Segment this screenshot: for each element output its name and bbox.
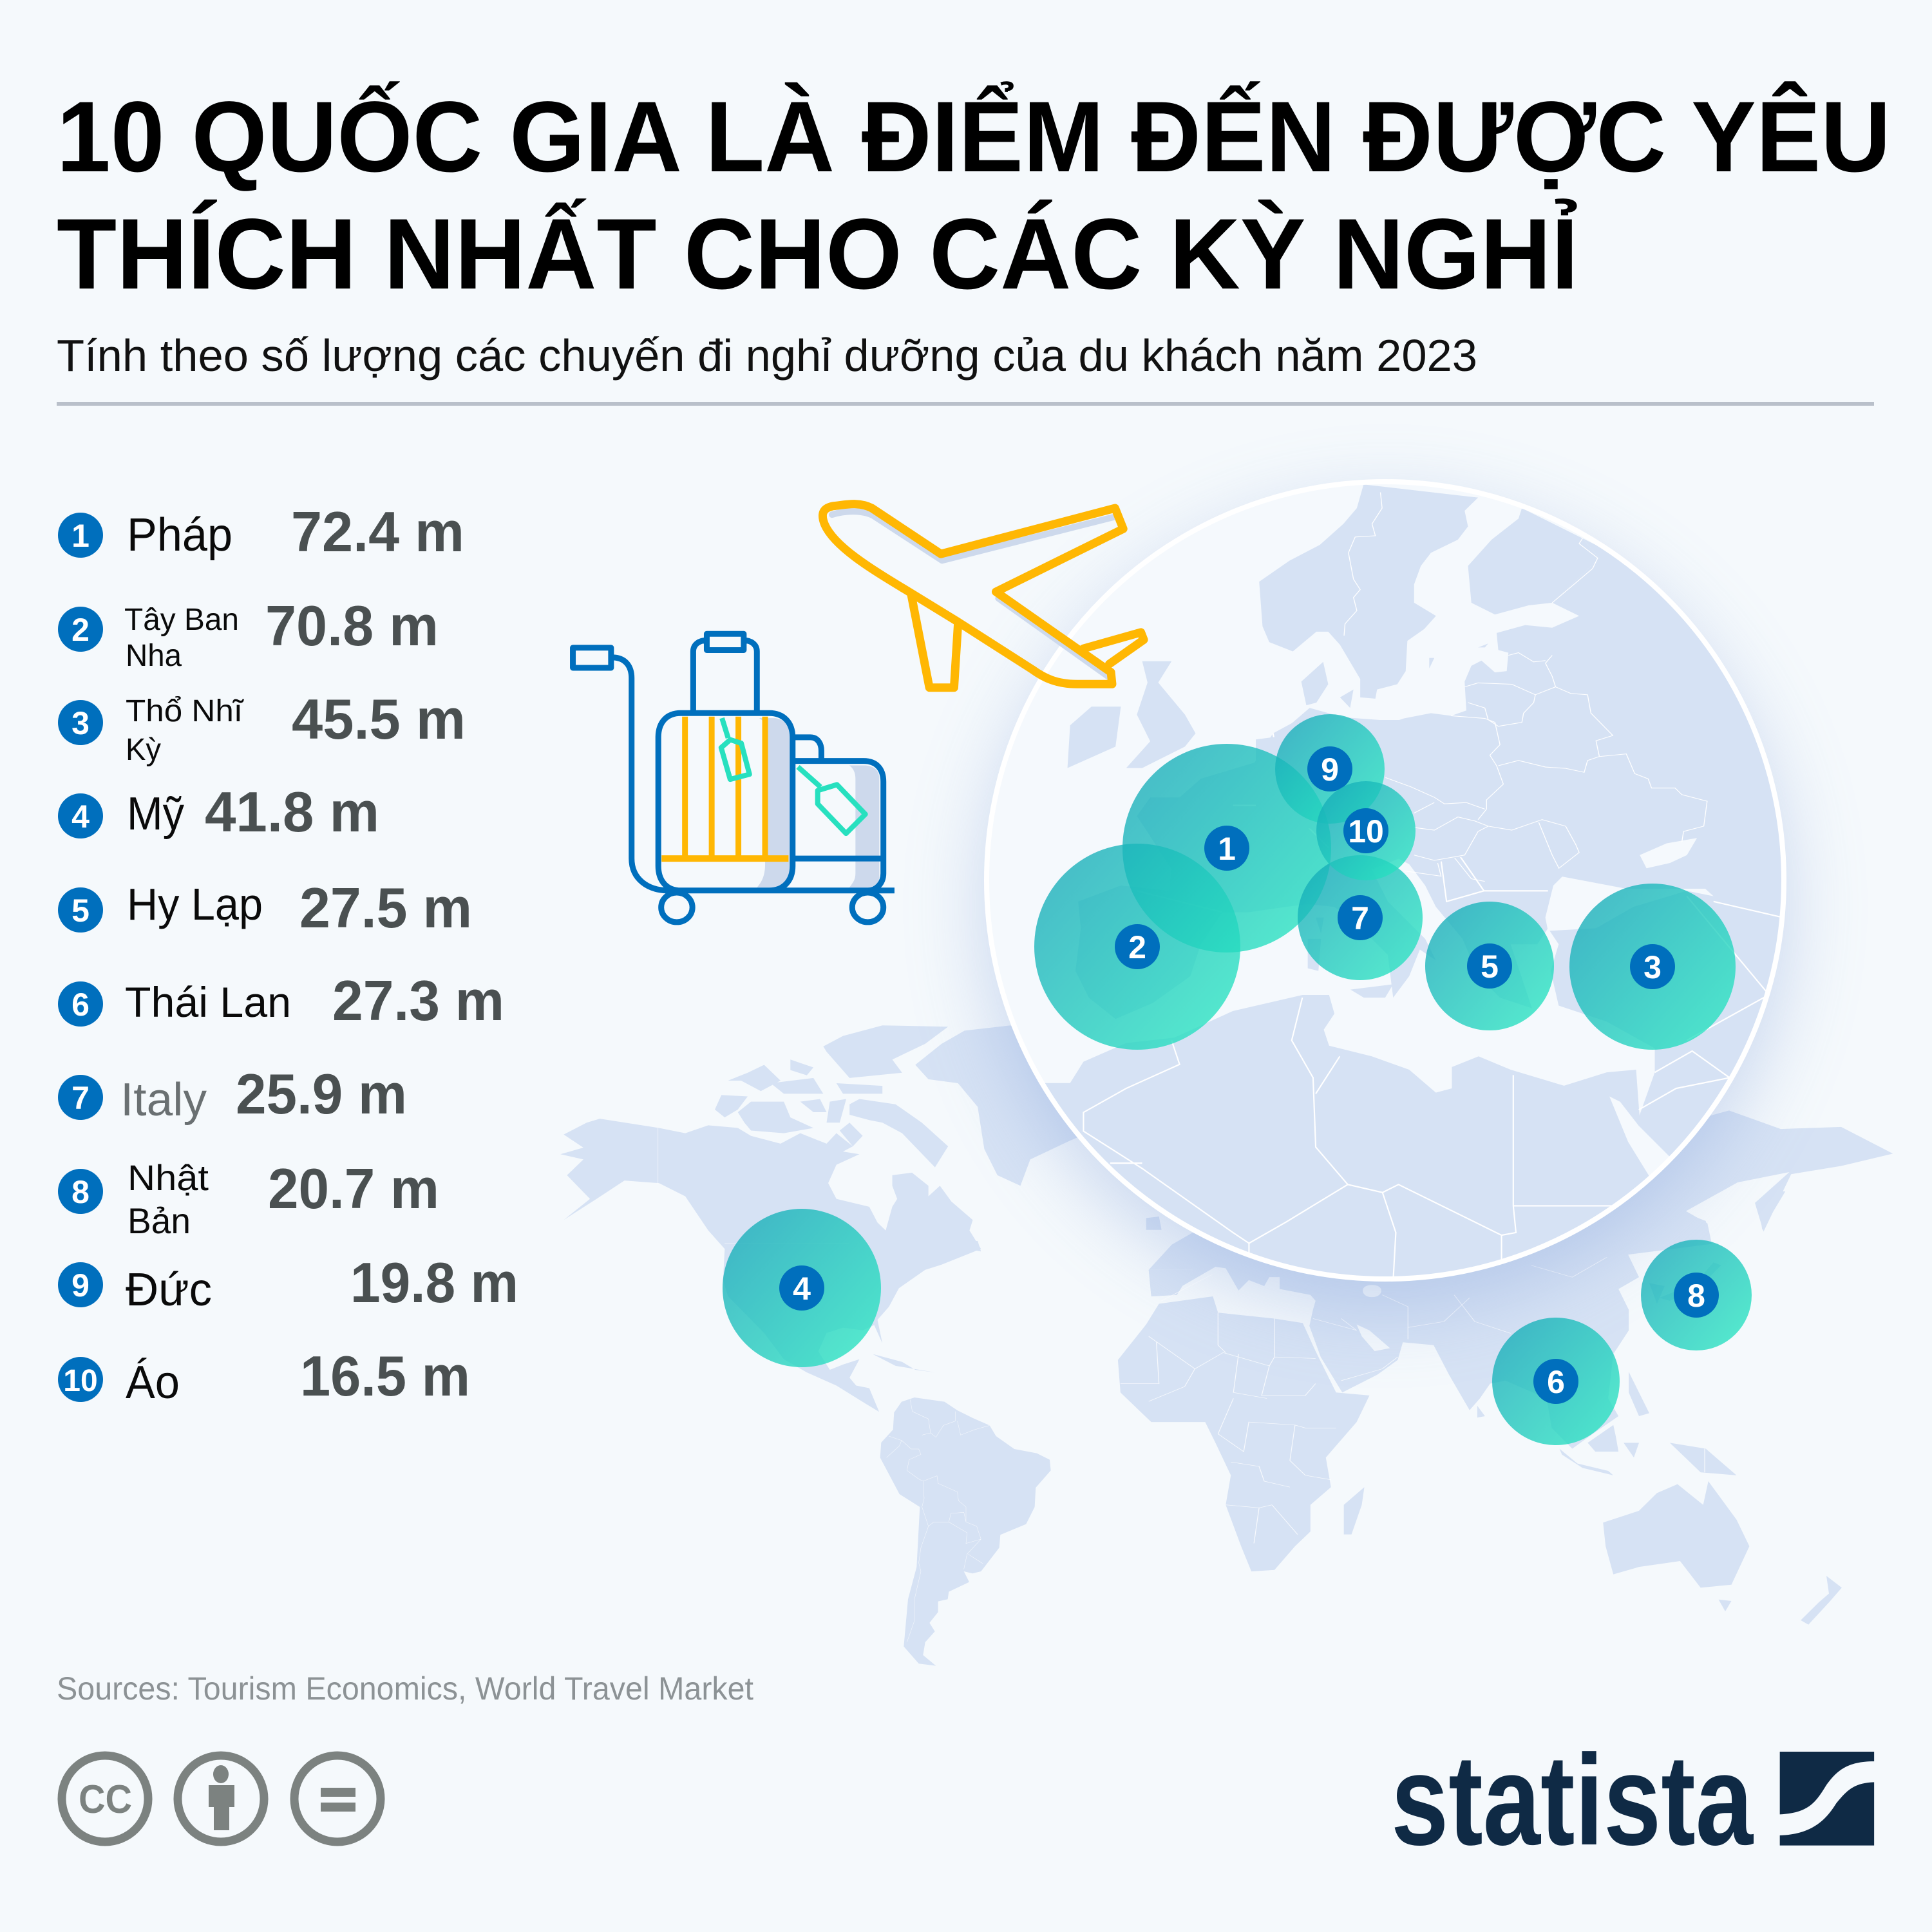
row 3: Thổ Nhĩ <box>126 694 245 728</box>
row 8: 20.7 m <box>268 1157 439 1220</box>
land: Britain <box>1146 1217 1162 1230</box>
land: Iberia <box>1149 1270 1192 1296</box>
bubble: Italy <box>1298 855 1423 980</box>
bubble: France: 1 <box>1218 831 1236 867</box>
land: Scandinavia <box>1259 484 1478 699</box>
land: Newfoundland and Caribbean <box>873 1241 981 1372</box>
row 9: 19.8 m <box>350 1251 518 1314</box>
bubble: Turkey: 3 <box>1643 949 1662 985</box>
icon: airplane <box>822 504 1144 688</box>
globe shadow <box>983 504 1788 1309</box>
sea: Persian Gulf and Caspian <box>1357 1285 1390 1351</box>
row 8: Nhật <box>128 1157 209 1198</box>
bubble: Japan <box>1641 1240 1752 1350</box>
suitcase stripes <box>685 717 765 858</box>
bubble: Turkey <box>1569 884 1736 1050</box>
bubble: Greece: 5 <box>1481 949 1499 985</box>
land: Africa close-up <box>1045 995 1669 1276</box>
row 8: 8 <box>71 1174 90 1210</box>
row 4: 4 <box>71 799 90 835</box>
borders: Africa and Balkans <box>1083 734 1783 1281</box>
wordmark: statista <box>1391 1728 1754 1872</box>
land: Arctic islands <box>715 1025 948 1168</box>
row 5 <box>58 876 472 940</box>
row 4 <box>58 780 379 844</box>
bubble: Spain <box>1034 844 1240 1050</box>
land: Madagascar <box>1344 1487 1365 1535</box>
row 2 <box>58 594 439 673</box>
land: Denmark and Baltic islands <box>1302 643 1488 708</box>
bubble: Thailand: 6 <box>1547 1364 1565 1400</box>
bubble: Thailand <box>1492 1318 1620 1445</box>
land: Sri Lanka <box>1477 1406 1485 1417</box>
luggage tags <box>721 718 866 833</box>
icon: no derivatives <box>294 1756 381 1842</box>
source: Sources: Tourism Economics, World Travel Market <box>57 1671 753 1707</box>
icon: cc: CC <box>79 1777 132 1822</box>
row 4: Mỹ <box>127 788 184 840</box>
land: Russia far east <box>1323 1110 1893 1260</box>
row 5: 27.5 m <box>299 876 472 940</box>
bubble: Greece <box>1425 902 1554 1030</box>
row 6 <box>58 969 504 1032</box>
bubble: USA <box>723 1209 881 1367</box>
borders: South America <box>887 1399 990 1642</box>
land inside globe <box>1045 484 1781 1276</box>
land: Australia <box>1603 1481 1749 1587</box>
land: Southeast Asia islands <box>1559 1372 1736 1475</box>
row 10 <box>58 1344 470 1408</box>
globe: Europe close-up <box>984 479 1786 1282</box>
row 1: 72.4 m <box>291 500 464 564</box>
land: Greenland <box>915 1025 1112 1186</box>
bubble chart: country markers <box>723 714 1752 1445</box>
row 7: 25.9 m <box>236 1062 407 1126</box>
row 7 <box>58 1062 407 1126</box>
land: Britain and Ireland <box>1068 661 1196 768</box>
borders: northern and eastern Europe <box>1344 492 1707 882</box>
land: Finland <box>1468 508 1599 614</box>
title <box>57 81 1891 310</box>
row 4: 41.8 m <box>205 780 379 844</box>
row 7: Italy <box>120 1074 207 1126</box>
title: 10 QUỐC GIA LÀ ĐIỂM ĐẾN ĐƯỢC YÊU <box>57 81 1891 193</box>
row 2: Nha <box>126 639 182 673</box>
land: central and eastern Europe <box>1256 538 1748 889</box>
row 1 <box>58 500 464 564</box>
row 3: 3 <box>71 705 90 741</box>
land: Africa, Asia, Oceania <box>1118 1191 1842 1625</box>
bubble: Japan: 8 <box>1687 1278 1705 1314</box>
row 5: 5 <box>71 893 90 929</box>
row 9: Đức <box>126 1264 212 1316</box>
icon: cc <box>62 1756 148 1842</box>
land: Tasmania and New Zealand <box>1719 1576 1842 1625</box>
title: THÍCH NHẤT CHO CÁC KỲ NGHỈ <box>57 198 1578 310</box>
land: southern Europe and Middle East <box>1270 717 1781 1157</box>
bubble: Germany: 9 <box>1321 752 1339 788</box>
row 9: 9 <box>71 1267 90 1303</box>
row 6: Thái Lan <box>125 978 291 1026</box>
suitcase frame <box>573 634 895 891</box>
row 2: 2 <box>71 612 90 648</box>
icon: creative commons <box>62 1756 381 1842</box>
row 6: 6 <box>71 987 90 1023</box>
bubble: Germany <box>1275 714 1385 824</box>
row 10: 10 <box>63 1364 98 1398</box>
row 10: 16.5 m <box>300 1344 470 1408</box>
bubble: USA: 4 <box>793 1271 811 1307</box>
suitcase shading <box>757 718 879 887</box>
bubble: Austria <box>1316 781 1416 880</box>
subtitle: Tính theo số lượng các chuyến đi nghỉ dưỡng của du khách năm 2023 <box>57 330 1477 381</box>
land: South America <box>880 1397 1051 1666</box>
sea: Black Sea <box>1546 876 1713 931</box>
bubble: Austria: 10 <box>1348 813 1384 849</box>
row 3: 45.5 m <box>292 687 466 751</box>
icon: attribution <box>178 1756 264 1842</box>
logo: statista <box>1391 1728 1874 1872</box>
land: Mediterranean islands <box>1307 952 1392 998</box>
row 2: Tây Ban <box>124 603 239 637</box>
row 9 <box>58 1251 518 1316</box>
world map <box>560 1025 1893 1666</box>
row 3: Kỳ <box>126 733 161 767</box>
land: North America <box>560 1025 1112 1412</box>
sea: Sea of Azov <box>1640 838 1697 868</box>
borders: Africa and Asia <box>1121 1221 1705 1543</box>
wheels <box>661 893 692 922</box>
logo mark <box>1780 1752 1874 1846</box>
row 1: 1 <box>71 518 90 554</box>
icon: luggage cart <box>573 634 895 922</box>
land: Sakhalin, Japan, Korea <box>1649 1191 1785 1303</box>
row 2: 70.8 m <box>265 594 439 658</box>
ranking list <box>58 500 518 1408</box>
row 3 <box>58 687 466 767</box>
bubble: Italy: 7 <box>1351 900 1369 936</box>
bubble: France <box>1122 744 1331 952</box>
row 6: 27.3 m <box>332 969 504 1032</box>
bubble: Spain: 2 <box>1128 929 1146 965</box>
sea: Red Sea <box>1609 1096 1671 1177</box>
land: Eurasia south <box>1149 1191 1711 1449</box>
row 5: Hy Lạp <box>127 879 263 929</box>
row 10: Áo <box>126 1357 180 1408</box>
row 7: 7 <box>71 1080 90 1116</box>
borders: North America <box>658 1128 849 1244</box>
row 8 <box>58 1157 439 1241</box>
row 1: Pháp <box>127 509 232 561</box>
globe ring <box>987 482 1784 1279</box>
row 8: Bản <box>128 1200 191 1241</box>
